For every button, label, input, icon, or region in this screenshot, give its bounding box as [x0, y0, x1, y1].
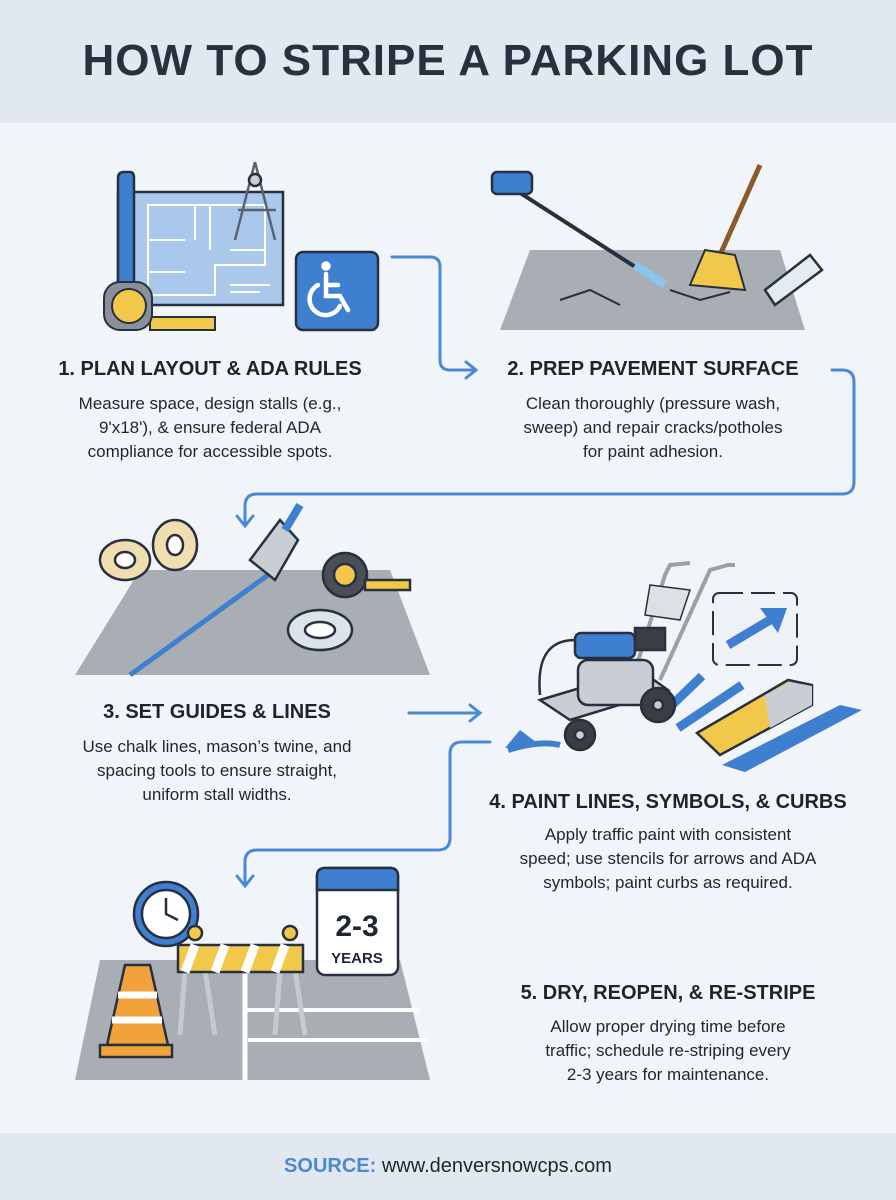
icon: pavement step2 — [492, 165, 822, 330]
step 5 heading: 5. DRY, REOPEN, & RE-STRIPE — [521, 982, 815, 1004]
step 4 text — [520, 825, 816, 892]
icon: line striper machine — [505, 563, 742, 750]
step 1 text: compliance for accessible spots. — [88, 442, 332, 461]
step 4 heading: 4. PAINT LINES, SYMBOLS, & CURBS — [489, 791, 847, 813]
step 2 text — [524, 394, 782, 461]
icon: ADA sign — [296, 252, 378, 330]
footer — [0, 1133, 896, 1200]
step 3 text — [82, 737, 352, 804]
icon: calendar: 2-3 — [335, 910, 379, 943]
step 5 text: Allow proper drying time before — [550, 1017, 786, 1036]
icon: ground step5 — [75, 960, 430, 1080]
step 5 text: traffic; schedule re-striping every — [545, 1041, 791, 1060]
step 3 text: spacing tools to ensure straight, — [97, 761, 337, 780]
header band — [0, 0, 896, 123]
step 3 heading: 3. SET GUIDES & LINES — [103, 701, 331, 723]
step 1 text: 9'x18'), & ensure federal ADA — [99, 418, 321, 437]
step 4 text: speed; use stencils for arrows and ADA — [520, 849, 816, 868]
step 1 text: Measure space, design stalls (e.g., — [79, 394, 341, 413]
icon: calendar — [317, 868, 398, 975]
arrow: step 4 to 5 — [237, 742, 490, 886]
step 2 text: Clean thoroughly (pressure wash, — [526, 394, 780, 413]
arrow: step 3 to 4 — [409, 705, 480, 721]
arrow: step 1 to 2 — [392, 257, 476, 378]
icon: blueprint — [118, 162, 283, 305]
step 4 text: Apply traffic paint with consistent — [545, 825, 791, 844]
icon: curb — [697, 680, 862, 772]
icon: arrow stencil — [713, 593, 797, 665]
icon: tape measure step1 — [104, 282, 215, 330]
icon: barricade — [178, 926, 305, 1035]
icon: surface step3 — [75, 505, 430, 675]
step 2 text: sweep) and repair cracks/potholes — [524, 418, 782, 437]
title: HOW TO STRIPE A PARKING LOT — [82, 36, 814, 85]
step 3 text: uniform stall widths. — [142, 785, 292, 804]
icon: calendar: YEARS — [331, 950, 383, 967]
step 2 text: for paint adhesion. — [583, 442, 723, 461]
step 1 text — [79, 394, 341, 461]
step 3 text: Use chalk lines, mason’s twine, and — [82, 737, 352, 756]
step 4 text: symbols; paint curbs as required. — [543, 873, 793, 892]
step 5 text — [545, 1017, 791, 1084]
step 1 heading: 1. PLAN LAYOUT & ADA RULES — [58, 358, 362, 380]
footer: SOURCE: www.denversnowcps.com — [284, 1155, 612, 1177]
step 2 heading: 2. PREP PAVEMENT SURFACE — [507, 358, 799, 380]
step 5 text: 2-3 years for maintenance. — [567, 1065, 769, 1084]
icon: cone — [100, 965, 172, 1057]
arrow: step 2 to 3 — [237, 370, 854, 526]
icon: clock — [134, 882, 198, 946]
